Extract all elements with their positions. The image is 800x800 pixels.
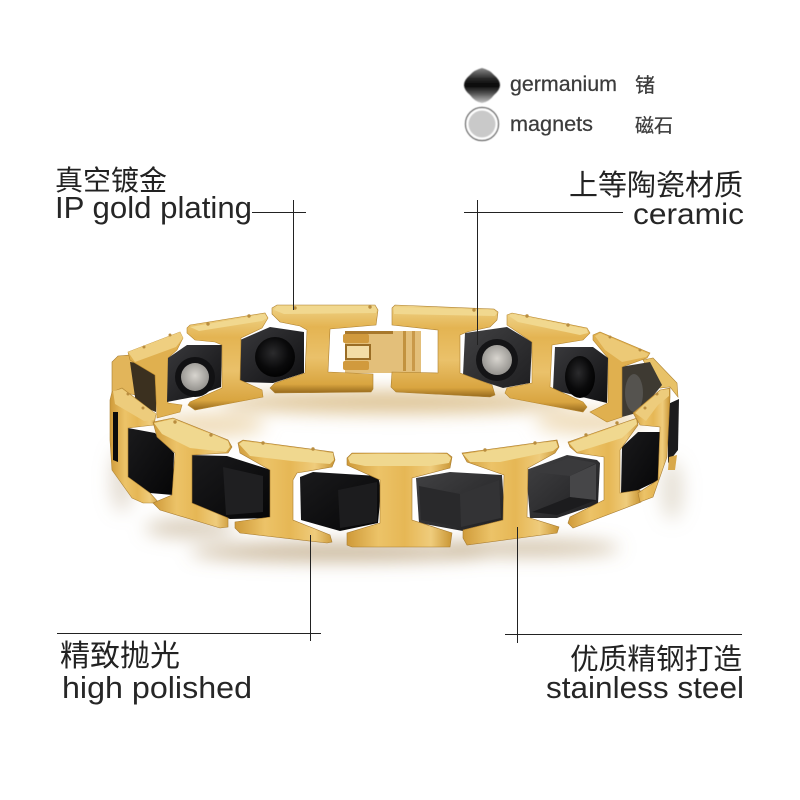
callout lines: stainless steel bbox=[505, 527, 742, 643]
dark interior right bbox=[620, 362, 662, 417]
back right links bbox=[391, 305, 678, 422]
tile R1 with magnet bbox=[463, 327, 532, 388]
label: gold plating: IP gold plating bbox=[55, 190, 252, 225]
back left links bbox=[112, 305, 378, 418]
link F7 bbox=[633, 388, 670, 502]
link R3 bbox=[590, 332, 650, 422]
callout: high polished bbox=[60, 631, 252, 705]
heading: steel Chinese: 优质精钢打造 bbox=[570, 637, 742, 678]
callout lines: ceramic bbox=[464, 200, 623, 345]
icon: germanium stone bbox=[464, 68, 500, 103]
link F5 bbox=[462, 440, 559, 545]
label: ceramic: ceramic bbox=[633, 198, 744, 231]
tile R2 with ball bbox=[553, 347, 608, 403]
callout lines: IP gold plating bbox=[252, 200, 306, 310]
legend label: germanium: germanium bbox=[510, 73, 617, 96]
tile sliver left bbox=[113, 412, 118, 462]
link 1 bbox=[270, 305, 378, 393]
link 2 bbox=[187, 313, 268, 410]
heading: gold plating Chinese: 真空镀金 bbox=[55, 159, 167, 199]
legend bbox=[464, 68, 673, 140]
link F2 bbox=[153, 418, 232, 528]
bracelet bbox=[110, 305, 683, 561]
heading: polished Chinese: 精致抛光 bbox=[60, 631, 180, 675]
link F4 centre bbox=[347, 453, 452, 547]
link F1 bbox=[110, 388, 160, 504]
label: high polished: high polished bbox=[62, 670, 252, 705]
ball tile bbox=[240, 327, 304, 383]
tile 3 bbox=[416, 472, 505, 531]
heading: ceramic Chinese: 上等陶瓷材质 bbox=[569, 162, 743, 204]
icon: magnet disc bbox=[466, 108, 498, 140]
tile 2 bbox=[300, 472, 381, 531]
callout: IP gold plating bbox=[55, 159, 252, 225]
link with interior bbox=[128, 332, 183, 418]
link F6 bbox=[568, 418, 641, 528]
clasp bbox=[343, 331, 421, 373]
link F3 bbox=[235, 440, 335, 543]
end link far left bbox=[112, 355, 136, 395]
link R2 bbox=[505, 313, 590, 412]
dark interior left bbox=[130, 362, 156, 412]
callout: stainless steel bbox=[546, 637, 744, 705]
legend label: magnets Chinese: 磁石 bbox=[635, 111, 673, 138]
rivets bbox=[126, 305, 658, 452]
bracelet shadows bbox=[111, 391, 683, 561]
tile 5 bbox=[621, 432, 661, 494]
link R1 bbox=[391, 305, 498, 397]
legend label: germanium Chinese: 锗 bbox=[635, 69, 655, 98]
tile 4 bbox=[526, 455, 600, 518]
callout: ceramic bbox=[569, 162, 744, 231]
front gold links bbox=[110, 388, 677, 547]
magnet tile bbox=[167, 345, 222, 402]
callout lines: high polished bbox=[57, 535, 321, 641]
tile sliver right bbox=[668, 399, 679, 463]
front ceramic tiles bbox=[128, 399, 679, 531]
far right end link bbox=[643, 358, 678, 397]
legend label: magnets: magnets bbox=[510, 113, 593, 136]
tile 0 bbox=[128, 428, 174, 495]
label: stainless steel: stainless steel bbox=[546, 670, 744, 705]
tile 1 bbox=[190, 455, 271, 519]
